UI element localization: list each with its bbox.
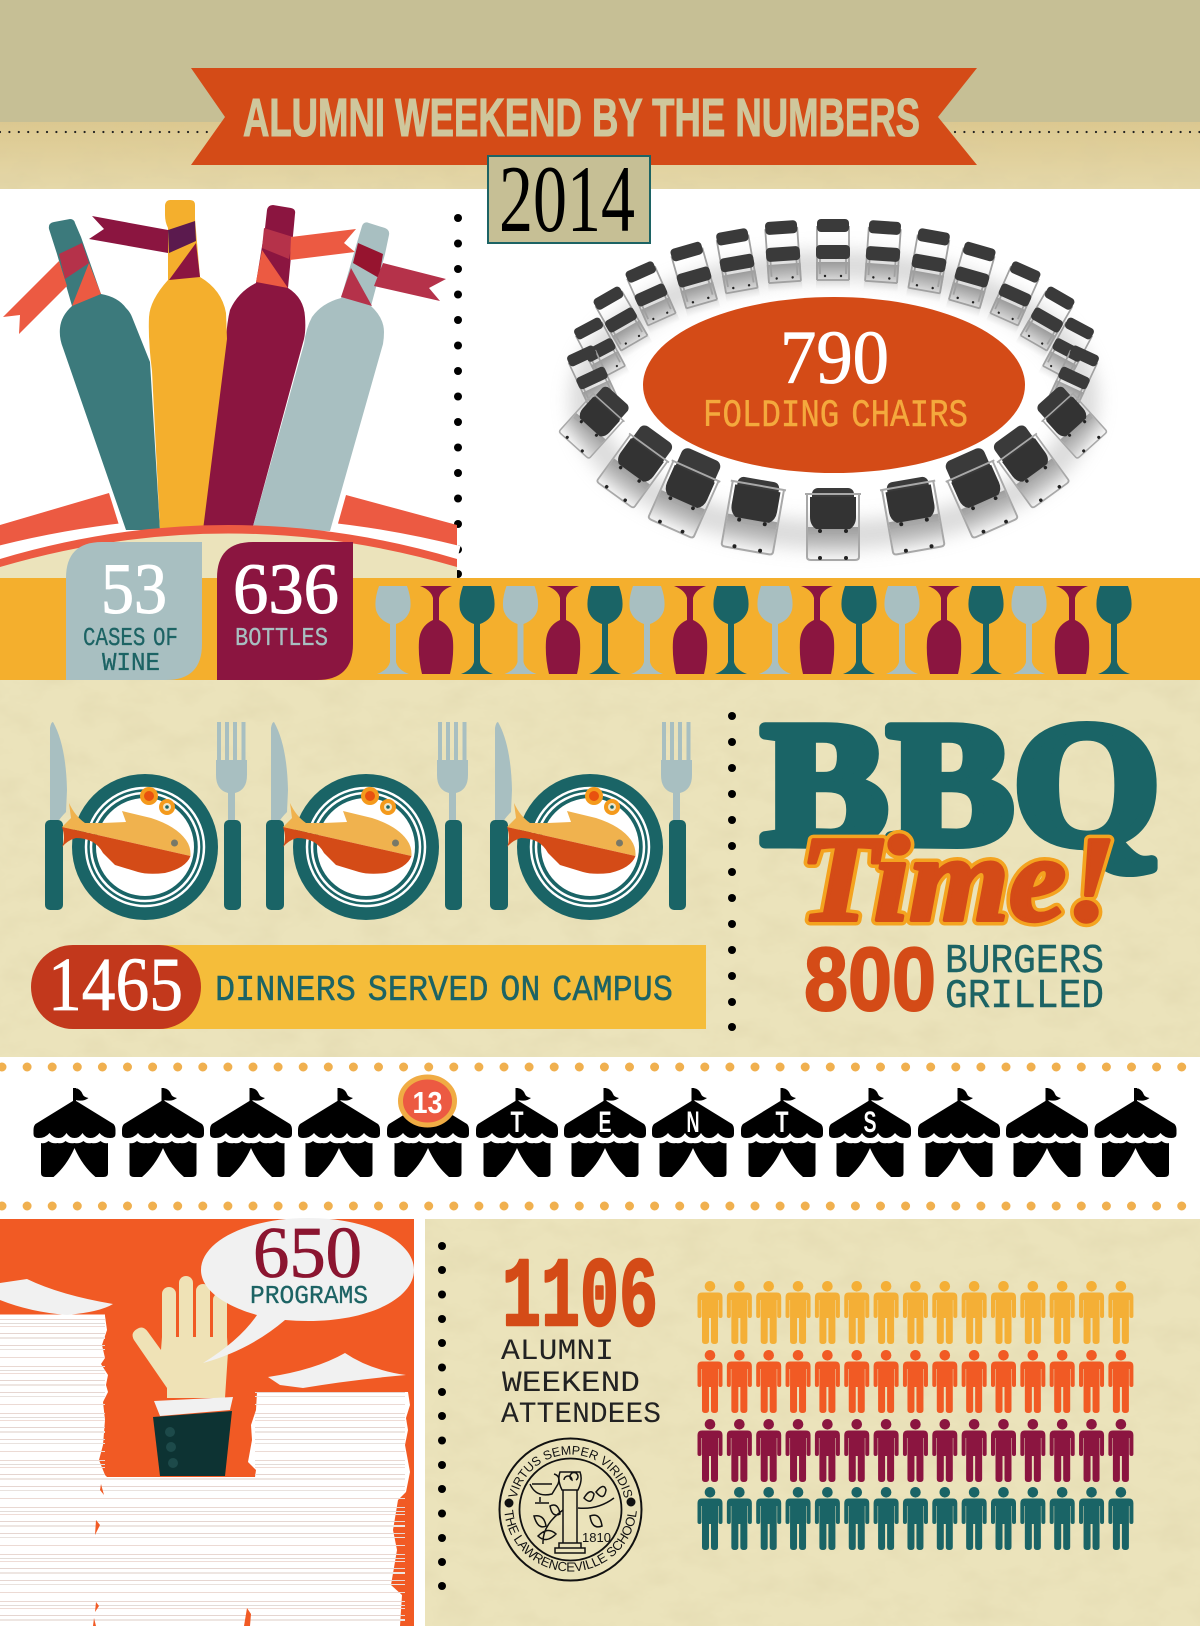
label: alumni weekend attendees (501, 1335, 661, 1432)
label: alumni weekend attendees: WEEKEND (502, 1367, 640, 1401)
bottle: teal (3, 219, 160, 530)
card: 53 cases of wine: WINE (102, 648, 160, 678)
year box (488, 146, 650, 252)
badge: 1465 (31, 945, 201, 1029)
label: dinners served: DINNERS SERVED ON CAMPUS (215, 970, 673, 1011)
chairs shadow (584, 265, 1084, 535)
label: programs: PROGRAMS (250, 1281, 368, 1311)
badge: 13 tents: 13 (412, 1085, 442, 1120)
row: teal attendees (698, 1487, 1133, 1550)
chairs: far half of ring (565, 219, 1101, 415)
chairs ellipse (643, 297, 1025, 473)
tent row (34, 1088, 1176, 1177)
paper stacks (0, 1316, 410, 1626)
school seal: THE LAWRENCEVILLE SCHOOL (504, 1510, 637, 1572)
chairs: near half of ring (556, 381, 1110, 563)
Time lettering: Time! (800, 812, 1116, 947)
row: yellow attendees (698, 1281, 1133, 1344)
panel: wine illustration background (0, 189, 1200, 578)
header band (0, 0, 1200, 189)
number: 800: 800 (804, 930, 936, 1030)
dotted divider: dinners and BBQ (728, 712, 736, 1031)
panel: attendees (425, 1219, 1200, 1626)
number: 790: 790 (780, 316, 889, 400)
ribbon arc front (0, 525, 457, 567)
pictogram: attendee rows (698, 1281, 1133, 1550)
speech bubble (201, 1212, 414, 1363)
card: 636 bottles (217, 542, 353, 680)
school seal (498, 1438, 642, 1582)
bottle: yellow (89, 200, 227, 530)
tent letters: N (686, 1106, 700, 1139)
label: alumni weekend attendees: ALUMNI (501, 1335, 614, 1369)
label: burgers grilled (945, 939, 1104, 1020)
panel: dinners and BBQ (0, 680, 1200, 1057)
year: 2014 (499, 146, 635, 252)
school seal: 1810 (582, 1530, 611, 1545)
bottle: grey blue (252, 222, 446, 531)
card: 53 cases of wine: CASES OF (83, 623, 178, 653)
bottle: maroon (202, 205, 356, 530)
panel: programs (0, 1212, 414, 1626)
tent letters: T (510, 1106, 524, 1139)
icon: raised hand (133, 1276, 233, 1476)
dotted rules (2, 1067, 1198, 1206)
dotted divider: attendees (438, 1242, 446, 1590)
loose sheet right (268, 1353, 406, 1388)
number: 1106: 1106 (502, 1244, 658, 1355)
title ribbon (191, 68, 977, 165)
label: alumni weekend attendees: ATTENDEES (501, 1398, 661, 1432)
row: orange attendees (698, 1350, 1133, 1413)
tent letters (510, 1106, 876, 1139)
loose sheet left (0, 1279, 113, 1315)
label: burgers grilled: BURGERS (945, 939, 1104, 985)
dotted divider: wine and chairs (454, 214, 462, 578)
card: 636 bottles: 636 (233, 549, 339, 629)
card: 53 cases of wine: 53 (101, 549, 167, 629)
tent letters: E (598, 1106, 612, 1139)
BBQ lettering: BBQ (762, 687, 1160, 882)
place settings (45, 722, 692, 920)
label: burgers grilled: GRILLED (945, 974, 1104, 1020)
card: 53 cases of wine (66, 542, 202, 680)
number: 650: 650 (253, 1212, 362, 1293)
panel: tents (0, 1057, 1200, 1219)
row: maroon attendees (698, 1419, 1133, 1482)
dinners bar (31, 943, 706, 1029)
Time lettering: Time! (800, 812, 1116, 947)
card: 636 bottles: BOTTLES (235, 623, 328, 653)
illustration: wine bottles (0, 200, 459, 556)
dinners bar: 1465 (48, 943, 183, 1027)
wine glasses row (375, 586, 1132, 674)
beige strip under arc (0, 533, 457, 578)
wine band (0, 542, 1200, 680)
school seal: VIRTUS SEMPER VIRIDIS (508, 1446, 632, 1498)
label: folding chairs: FOLDING CHAIRS (703, 394, 968, 438)
badge: 13 tents (400, 1077, 454, 1125)
ribbon gap (0, 523, 459, 552)
panel: folding chairs (556, 219, 1110, 563)
ribbon band behind bottles (0, 493, 457, 556)
tent letters: T (776, 1106, 788, 1139)
tent letters: S (864, 1106, 876, 1139)
